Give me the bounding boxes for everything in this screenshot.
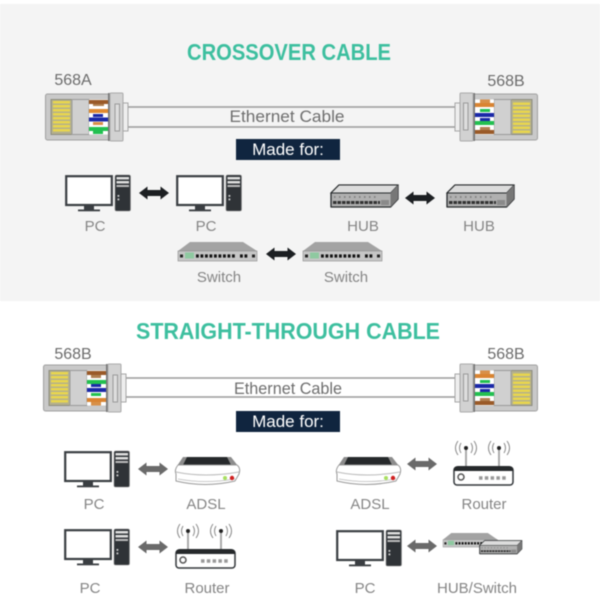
- device pair: PC to Router: Router: [184, 580, 230, 597]
- made for badge: Made for:: [252, 412, 324, 431]
- device pair: Switch to Switch: [178, 242, 382, 286]
- panel: straight-through cable: [44, 318, 538, 597]
- connector: 568B right: [455, 364, 538, 412]
- connector: 568B: [455, 93, 538, 141]
- connector: 568B left: [44, 364, 126, 412]
- device pair: PC to PC: PC: [196, 218, 217, 235]
- label: Ethernet Cable: Ethernet Cable: [230, 107, 344, 126]
- device pair: Switch to Switch: Switch: [197, 269, 241, 286]
- label: Ethernet Cable: Ethernet Cable: [234, 379, 342, 398]
- device pair: PC to HUB/Switch: PC: [355, 580, 376, 597]
- label: 568B left: 568B: [54, 346, 92, 363]
- device pair: ADSL to Router: Router: [461, 496, 507, 513]
- device pair: PC to PC: [66, 175, 242, 235]
- label: 568B right: 568B: [487, 346, 525, 363]
- title: straight-through cable: STRAIGHT-THROUGH CABLE: [136, 318, 440, 344]
- connector: 568A: [46, 93, 128, 141]
- device pair: ADSL to Router: ADSL: [350, 496, 390, 513]
- panel: crossover cable: [0, 4, 600, 301]
- device pair: PC to ADSL: [65, 451, 240, 513]
- made for badge: Made for:: [252, 140, 324, 159]
- label: 568A: 568A: [54, 72, 92, 89]
- device pair: PC to HUB/Switch: HUB/Switch: [437, 580, 517, 597]
- cable lines: [128, 107, 457, 127]
- device pair: PC to ADSL: ADSL: [186, 496, 226, 513]
- device pair: PC to ADSL: PC: [84, 496, 105, 513]
- device pair: Switch to Switch: Switch: [324, 269, 368, 286]
- device pair: PC to HUB/Switch: [337, 530, 522, 597]
- device pair: HUB to HUB: [331, 185, 514, 235]
- cable lines: [126, 378, 457, 397]
- device pair: PC to PC: PC: [85, 218, 106, 235]
- made for badge: [236, 411, 340, 432]
- device pair: PC to Router: [65, 524, 235, 597]
- device pair: HUB to HUB: HUB: [463, 218, 495, 235]
- label: 568B right: 568B: [487, 73, 525, 90]
- device pair: ADSL to Router: [336, 441, 513, 513]
- title: crossover cable: CROSSOVER CABLE: [187, 39, 391, 65]
- device pair: HUB to HUB: HUB: [347, 218, 379, 235]
- made for badge: [236, 139, 340, 160]
- device pair: PC to Router: PC: [80, 580, 101, 597]
